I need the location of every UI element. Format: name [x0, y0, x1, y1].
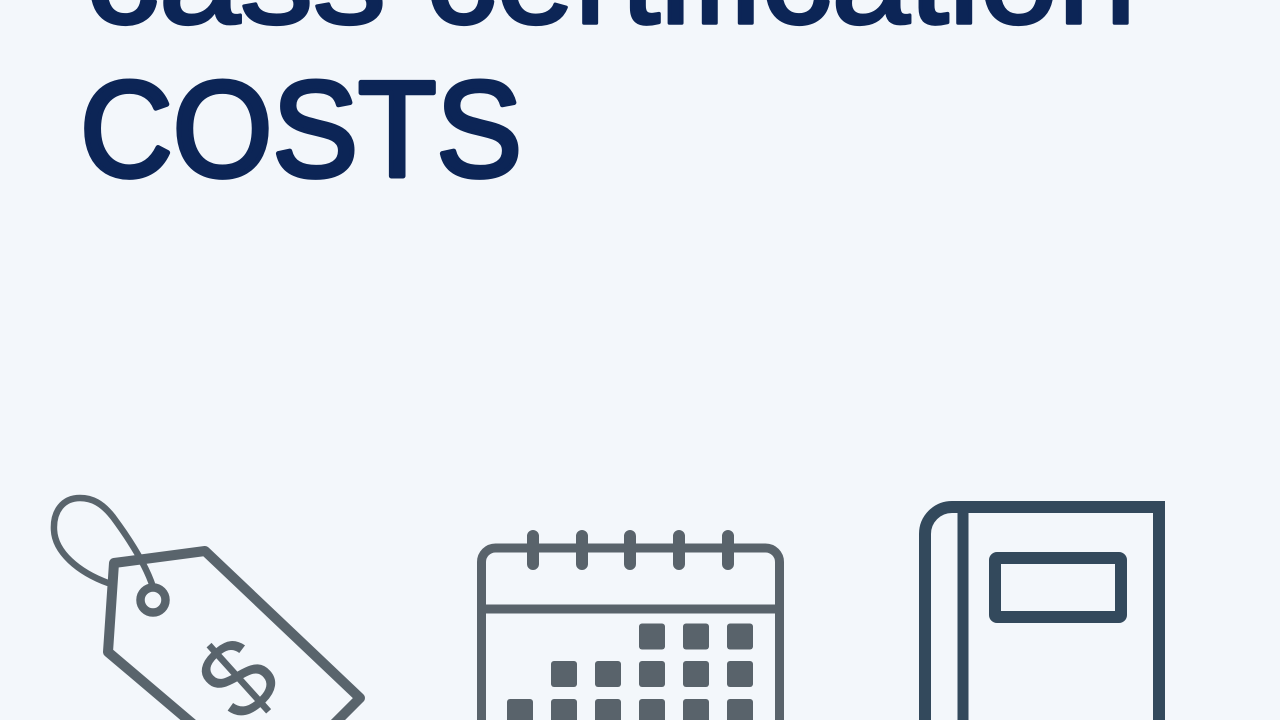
title line: COSTS: COSTS [80, 53, 522, 205]
title [80, 0, 1136, 205]
icon: calendar [481, 536, 780, 720]
icon: book [925, 507, 1159, 720]
icon: price tag [54, 498, 360, 720]
